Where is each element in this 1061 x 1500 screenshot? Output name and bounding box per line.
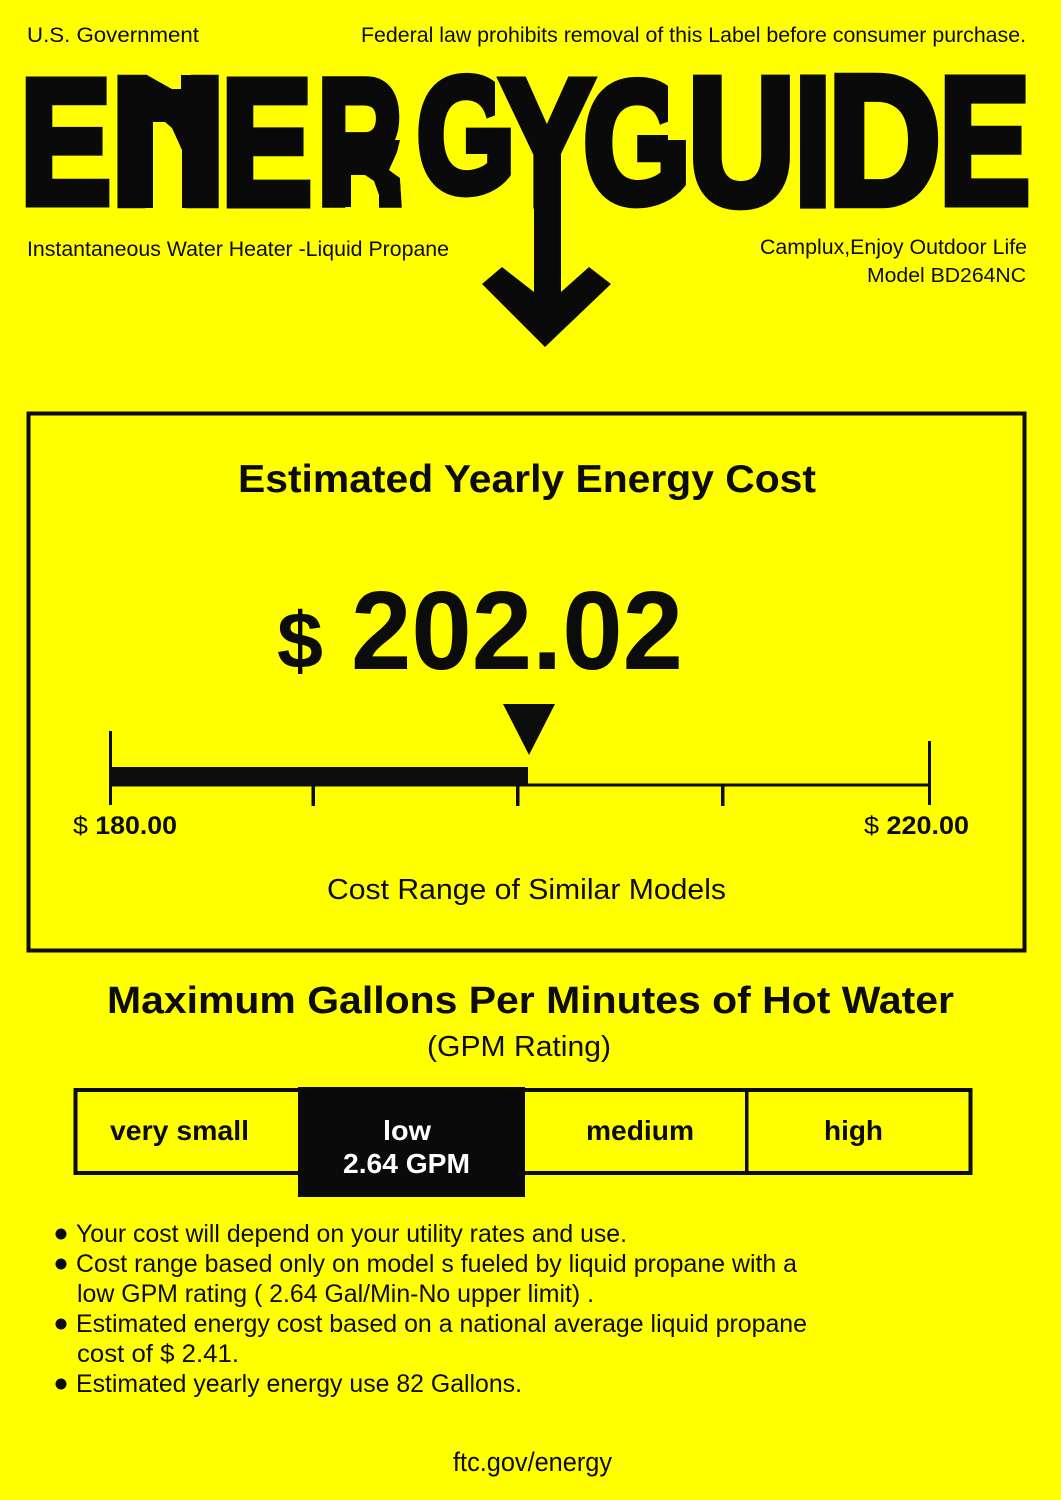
footer link text: ftc.gov/energy — [453, 1447, 612, 1477]
rating: high: high — [824, 1115, 883, 1146]
product type: Instantaneous Water Heater -Liquid Propane — [27, 238, 449, 261]
title: EnergyGuide logo with arrow: E — [939, 40, 1030, 241]
rating: very small: very small — [110, 1115, 249, 1146]
manufacturer: Camplux,Enjoy Outdoor Life — [760, 236, 1027, 259]
header notice: federal law: Federal law prohibits removal of this Label before consumer purchase. — [361, 24, 1026, 47]
GPM subheading: (GPM Rating) — [427, 1031, 611, 1063]
selected rating cell — [298, 1087, 525, 1197]
title: EnergyGuide logo with arrow: E — [20, 43, 111, 241]
title: EnergyGuide logo with arrow: U — [688, 40, 795, 244]
cost value: 202.02 — [351, 569, 683, 693]
cost range scale — [109, 731, 931, 806]
rating: medium: medium — [586, 1115, 694, 1146]
scale caption: Cost Range of Similar Models — [327, 874, 726, 906]
title: EnergyGuide logo with arrow: R — [317, 43, 403, 241]
notes list: low GPM rating ( 2.64 Gal/Min-No upper limit) . — [77, 1280, 594, 1308]
title: EnergyGuide logo with arrow: Y — [500, 43, 594, 243]
scale low label: $ 180.00 — [73, 812, 177, 840]
GPM rating bar — [76, 1087, 970, 1197]
title: EnergyGuide logo with arrow: G — [417, 44, 515, 226]
model number: Model BD264NC — [867, 265, 1026, 287]
notes list: Your cost will depend on your utility rates and use. — [76, 1220, 627, 1248]
title: EnergyGuide logo with arrow: G — [583, 47, 691, 240]
scale high label: $ 220.00 — [864, 812, 969, 840]
marker triangle — [503, 704, 555, 755]
rating value: 2.64 GPM — [343, 1148, 470, 1179]
title: EnergyGuide logo with arrow: I — [794, 39, 831, 243]
title: EnergyGuide logo with arrow: N — [110, 40, 226, 243]
title: EnergyGuide logo with arrow: E — [221, 42, 312, 242]
title: EnergyGuide logo with arrow: D — [828, 38, 941, 244]
title: EnergyGuide logo with arrow — [20, 38, 1030, 347]
notes list: Estimated yearly energy use 82 Gallons. — [76, 1370, 522, 1398]
notes list: Cost range based only on model s fueled by liquid propane with a — [76, 1250, 797, 1278]
notes list: Estimated energy cost based on a national average liquid propane — [76, 1310, 807, 1338]
notes list: cost of $ 2.41. — [77, 1340, 239, 1368]
GPM heading: Maximum Gallons Per Minutes of Hot Water — [107, 980, 954, 1022]
notes list — [56, 1220, 807, 1398]
header notice: U.S. Government: U.S. Government — [27, 24, 199, 47]
panel: estimated yearly energy cost — [28, 414, 1024, 950]
panel heading: Estimated Yearly Energy Cost — [238, 458, 816, 501]
rating: low: low — [383, 1115, 431, 1146]
cost value: $ — [277, 596, 323, 685]
